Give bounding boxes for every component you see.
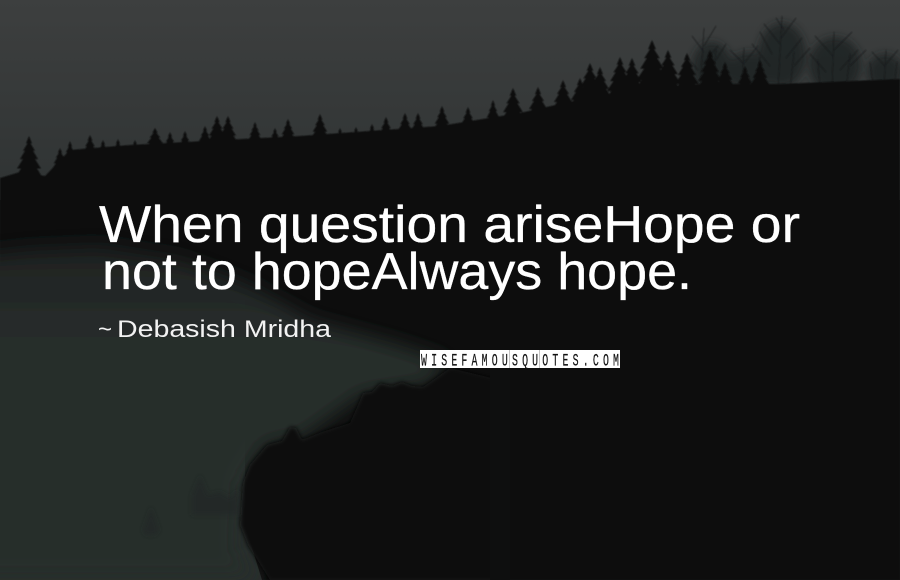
conifer tree line: [14, 40, 772, 180]
author attribution: ~: [98, 316, 112, 343]
quote line 2: not to hopeAlways hope.: [102, 243, 692, 301]
quote text: [99, 196, 800, 301]
author attribution: Debasish Mridha: [117, 316, 332, 343]
watermark badge: WISEFAMOUSQUOTES.COM: [421, 352, 619, 372]
bare winter trees on the ridge: [686, 16, 900, 94]
lower forest hill: [240, 368, 500, 580]
fog bank: [0, 245, 450, 580]
background: overcast sky: [0, 0, 900, 200]
quote line 1: When question ariseHope or: [99, 196, 800, 254]
distant misty trees: [143, 476, 240, 535]
